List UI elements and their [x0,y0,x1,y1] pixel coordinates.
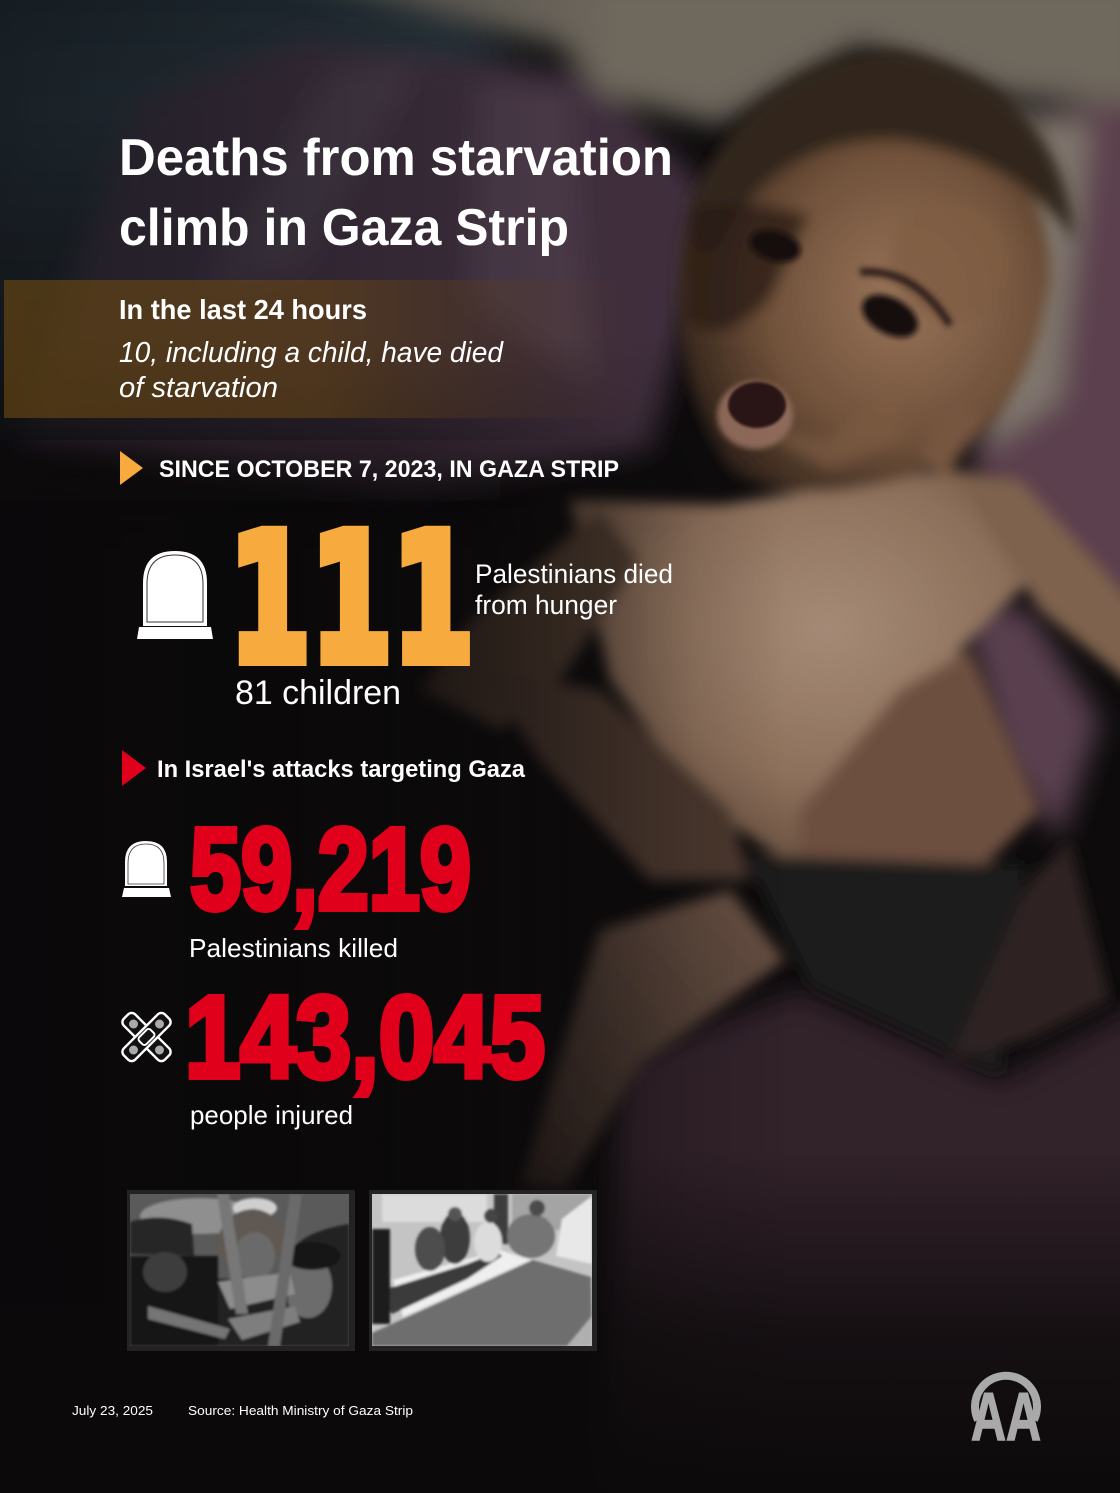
section heading: Israel's attacks: In Israel's attacks targeting Gaza [157,756,526,783]
date: July 23, 2025 [72,1403,153,1418]
title: Deaths from starvation [119,129,673,187]
section heading: Israel's attacks [122,750,526,786]
photo: crowd waiting for food [127,1190,355,1351]
icon: bandage [120,1011,173,1063]
subheading: In the last 24 hours [119,294,367,325]
deaths statement [119,337,504,404]
icon: small gravestone [122,841,171,897]
deaths statement: 10, including a child, have died [119,337,504,369]
stat: killed [189,804,471,963]
children count: 81 children [235,674,401,712]
section heading: since October 7: SINCE OCTOBER 7, 2023, IN GAZA STRIP [159,456,619,483]
source: Source: Health Ministry of Gaza Strip [188,1403,413,1418]
logo: Anadolu Agency: AA [971,1379,1041,1455]
title: climb in Gaza Strip [119,199,569,257]
logo: Anadolu Agency [971,1376,1041,1455]
icon: large gravestone [137,551,213,639]
stat: injured: 143,045 [185,972,545,1102]
stat: 111 hunger deaths: 111 [229,497,474,702]
injured label: people injured [190,1100,353,1130]
photo: hospital stretcher [369,1190,597,1351]
panel: last 24 hours [4,280,644,418]
child's body in tonal masses [570,470,1040,865]
title [119,129,673,257]
hunger label [475,559,673,620]
stat: killed: 59,219 [190,804,471,934]
hunger label: from hunger [475,590,617,620]
killed label: Palestinians killed [189,933,398,963]
deaths statement: of starvation [119,372,278,404]
hunger label: Palestinians died [475,559,673,589]
facial features [717,381,793,449]
